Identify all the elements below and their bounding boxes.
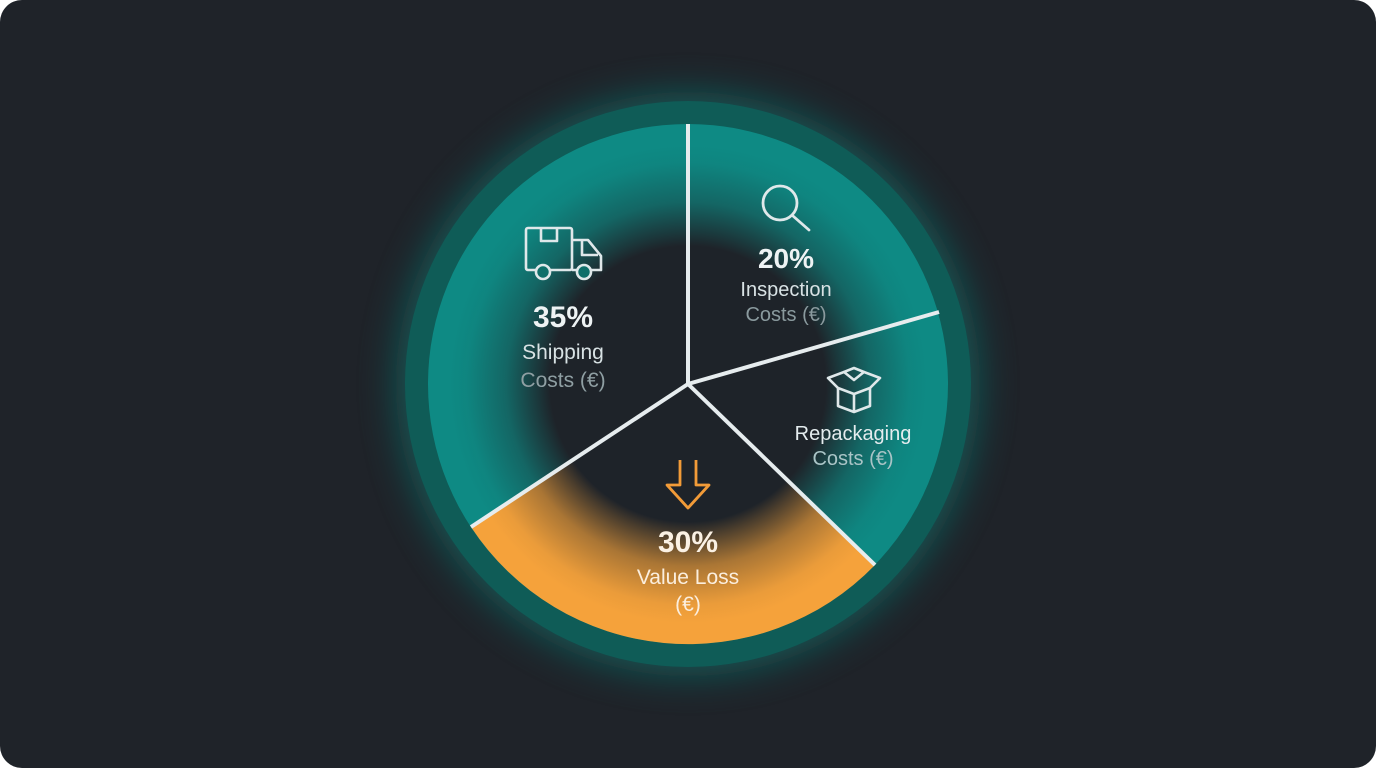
icon: box (828, 368, 880, 412)
icon: magnifier (763, 186, 809, 230)
icon: down arrow (667, 460, 709, 508)
divider lines (471, 124, 939, 565)
label: repackaging: Repackaging (795, 423, 911, 445)
pie teal base (428, 124, 948, 644)
label: inspection: Costs (€) (745, 304, 827, 326)
icon: truck (526, 228, 601, 279)
label: shipping: Costs (€) (520, 369, 606, 392)
label: shipping: Shipping (522, 341, 604, 364)
label: inspection: Inspection (740, 279, 832, 301)
label: inspection: 20% (758, 243, 814, 274)
inner dark shading (428, 124, 948, 644)
outer glow (396, 92, 980, 676)
label: inspection (740, 243, 832, 326)
label: value loss: Value Loss (637, 566, 739, 589)
label: repackaging (795, 423, 911, 470)
outer ring (405, 101, 971, 667)
label: repackaging: Costs (€) (812, 448, 894, 470)
orange segment: value loss (471, 384, 875, 644)
label: value loss (637, 526, 739, 616)
label: shipping (520, 301, 606, 392)
label: value loss: (€) (675, 593, 701, 616)
label: value loss: 30% (658, 526, 718, 559)
label: shipping: 35% (533, 301, 593, 334)
